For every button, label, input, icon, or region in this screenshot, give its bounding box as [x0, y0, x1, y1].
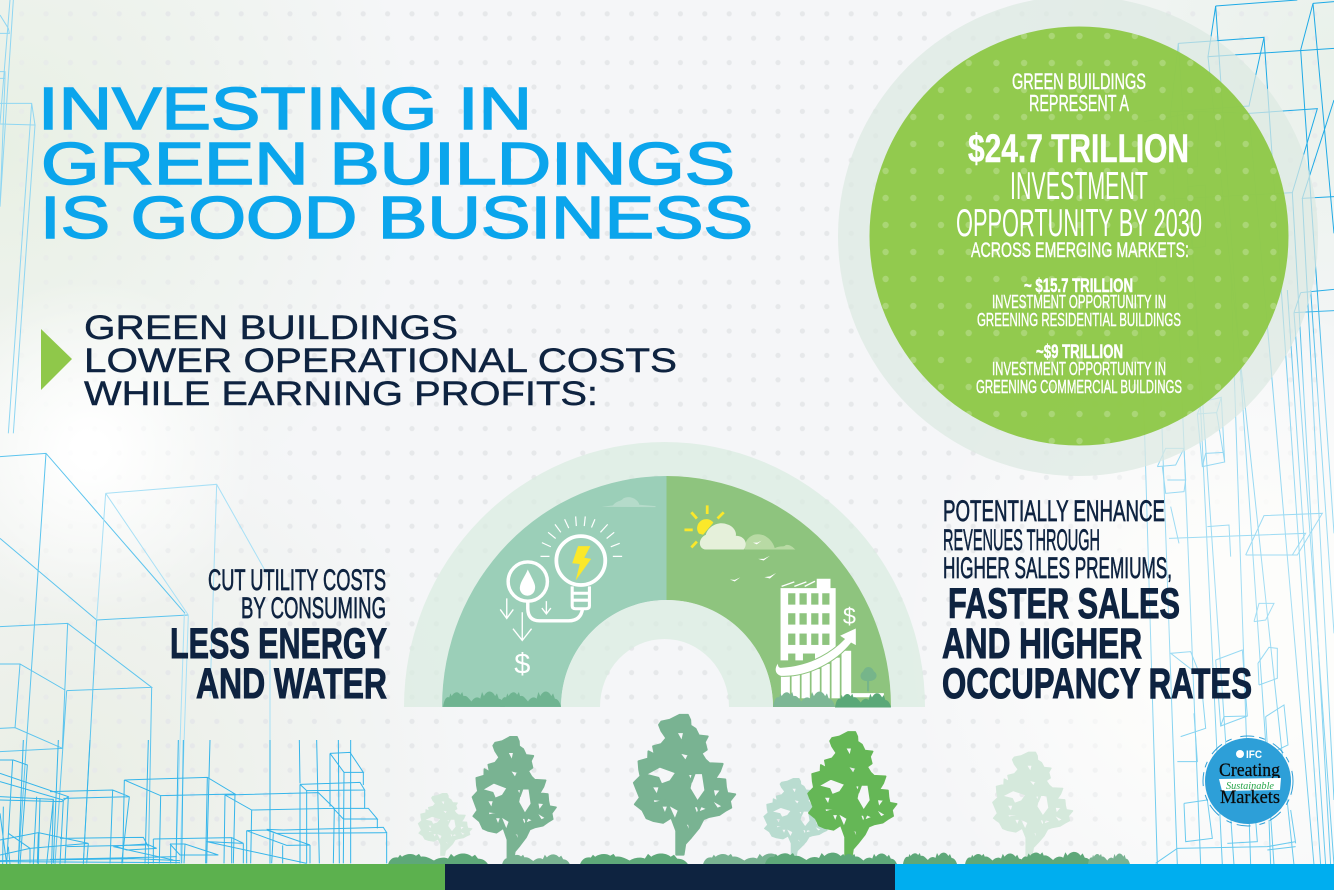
- trees: [418, 715, 1072, 861]
- circle text: INVESTMENT OPPORTUNITY IN: [992, 359, 1166, 379]
- shrubs along ground: [388, 852, 1130, 865]
- circle text: ACROSS EMERGING MARKETS:: [971, 239, 1189, 262]
- circle text: INVESTMENT: [1010, 165, 1148, 208]
- icon: faint cloud left: [601, 497, 656, 507]
- text block: cut utility costs: [170, 564, 387, 708]
- icon: down arrows and dollar: [500, 598, 551, 681]
- subtitle: GREEN BUILDINGS: [84, 309, 458, 347]
- circle text: REPRESENT A: [1029, 90, 1129, 116]
- tree: pale teal: [764, 779, 829, 857]
- circle text: GREENING RESIDENTIAL BUILDINGS: [977, 310, 1181, 330]
- arrow: green triangle: [41, 329, 72, 390]
- wireframe buildings: bottom left cluster: [0, 740, 387, 864]
- logo: IFC Creating Sustainable Markets: Sustainable: [1226, 780, 1274, 792]
- title: [38, 76, 753, 251]
- panel: investment opportunity circle: [838, 0, 1318, 476]
- logo: IFC Creating Sustainable Markets: Markets: [1220, 787, 1280, 808]
- title: GREEN BUILDINGS: [41, 131, 735, 197]
- circle dots: [870, 26, 1288, 446]
- text block: enhance revenues: HIGHER SALES PREMIUMS,: [943, 552, 1172, 585]
- circle text: [956, 69, 1202, 397]
- text block: cut utility costs: BY CONSUMING: [241, 592, 386, 625]
- wireframe buildings: top left: [0, 0, 35, 433]
- outer pale arc: [404, 442, 925, 707]
- right green quadrant: [666, 476, 891, 707]
- tree: tallest: [634, 715, 735, 855]
- tree: bright green: [808, 732, 897, 859]
- icon: lightning bolt: [572, 546, 591, 581]
- text block: enhance revenues: REVENUES THROUGH: [943, 524, 1100, 557]
- bottom colour bar: [0, 864, 1334, 890]
- left teal quadrant: [442, 476, 666, 707]
- icon: down arrows and dollar: $: [514, 649, 530, 681]
- circle text: $24.7 TRILLION: [968, 127, 1189, 171]
- text block: cut utility costs: LESS ENERGY: [170, 620, 387, 668]
- text block: cut utility costs: CUT UTILITY COSTS: [208, 564, 386, 597]
- text block: enhance revenues: AND HIGHER: [942, 620, 1142, 668]
- title: INVESTING IN: [38, 76, 532, 142]
- panel: semicircle illustration: [404, 442, 925, 708]
- title: IS GOOD BUSINESS: [40, 185, 753, 251]
- icon: building with rising arrow: $: [843, 603, 856, 629]
- icon: cable: [528, 601, 583, 621]
- icons in zoom coordinates: [500, 497, 884, 698]
- text block: enhance revenues: POTENTIALLY ENHANCE: [943, 495, 1165, 528]
- outer pale ring: [838, 0, 1318, 476]
- icon: water drop: [508, 562, 547, 601]
- subtitle: [84, 309, 677, 413]
- tree: pale right: [993, 752, 1072, 855]
- text block: enhance revenues: FASTER SALES: [948, 580, 1180, 628]
- green circle: [870, 26, 1288, 446]
- circle text: GREEN BUILDINGS: [1012, 69, 1146, 94]
- text block: enhance revenues: [942, 495, 1252, 708]
- logo: IFC Creating Sustainable Markets: [1203, 736, 1293, 826]
- tree: pale far left: [418, 793, 472, 855]
- subtitle: LOWER OPERATIONAL COSTS: [84, 342, 677, 380]
- logo: IFC Creating Sustainable Markets: Creating: [1219, 760, 1280, 781]
- circle text: INVESTMENT OPPORTUNITY IN: [992, 292, 1166, 312]
- wireframe buildings: lower left: [0, 453, 270, 864]
- circle text: ~ $15.7 TRILLION: [1024, 276, 1133, 297]
- icon: light bulb: [541, 516, 622, 609]
- text block: cut utility costs: AND WATER: [196, 660, 387, 708]
- subtitle: WHILE EARNING PROFITS:: [84, 375, 598, 413]
- icon: building with rising arrow: [775, 579, 884, 698]
- icon: sun and clouds: [684, 505, 795, 582]
- wireframe buildings: right side: [1141, 0, 1334, 865]
- shrubs in semicircle: [443, 692, 891, 708]
- tree: medium green: [472, 737, 556, 861]
- circle text: GREENING COMMERCIAL BUILDINGS: [976, 377, 1182, 397]
- logo: IFC Creating Sustainable Markets: IFC: [1246, 749, 1262, 761]
- circle text: ~$9 TRILLION: [1036, 342, 1123, 363]
- inner pale arc: [561, 600, 773, 707]
